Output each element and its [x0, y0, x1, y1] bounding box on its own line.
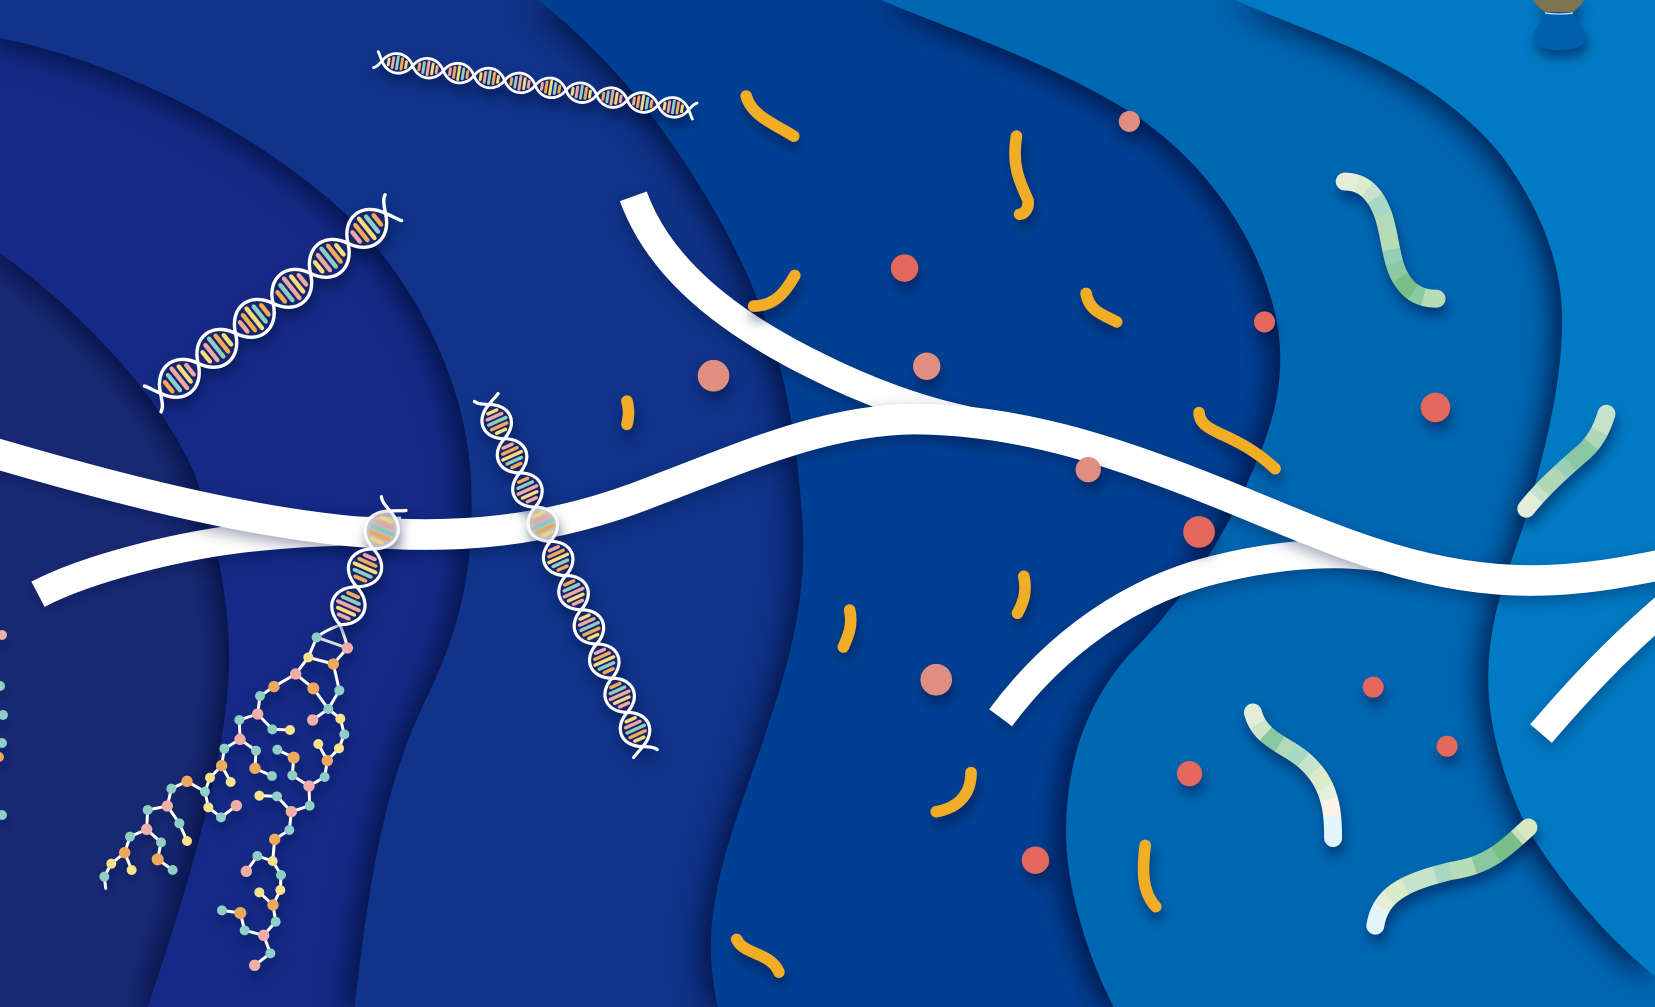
- layer 3: [538, 0, 1655, 1007]
- worm 4: [1366, 819, 1537, 935]
- pink nodes: [141, 642, 353, 971]
- fragment 5: [627, 401, 629, 424]
- ribbon: main strand: [0, 419, 1655, 581]
- flask body: [1533, 13, 1586, 50]
- ribbon: left branch: [38, 531, 401, 594]
- molecule bonds: [104, 625, 347, 965]
- DNA helix: diagonal left: [141, 192, 406, 414]
- RNA molecule unravelling from helix: [99, 625, 353, 971]
- fragment 8: [843, 610, 851, 647]
- yellow nodes: [106, 652, 345, 897]
- flask rim: [1545, 13, 1573, 14]
- worm 2: [1517, 405, 1615, 518]
- orange nodes: [119, 658, 339, 919]
- fragment 6: [1199, 413, 1275, 469]
- ribbon: far right branch: [1541, 596, 1655, 734]
- fragment 2: [1015, 136, 1028, 214]
- molecule fragment at left edge: [0, 630, 8, 820]
- DNA helix: short, above molecule: [325, 495, 409, 631]
- flask cap: [1533, 0, 1584, 12]
- DNA helix: crossing the ribbon: [472, 391, 660, 761]
- ribbon: upper branch: [633, 196, 988, 424]
- fragment 7: [1018, 576, 1025, 613]
- icon: flask at top right: [1533, 0, 1586, 50]
- teal nodes: [99, 632, 349, 958]
- green segmented worms: [1244, 173, 1615, 935]
- pink dots: [698, 111, 1140, 696]
- dots: [698, 111, 1458, 874]
- red dots: [891, 254, 1458, 874]
- worm 3: [1244, 703, 1342, 847]
- fragment 4: [1086, 293, 1117, 322]
- white ribbons: [0, 196, 1655, 734]
- fragment 10: [1143, 845, 1156, 907]
- layer 1: [1235, 0, 1655, 976]
- ribbon: lower right branch: [1001, 554, 1409, 718]
- layer 2: [881, 0, 1655, 1007]
- DNA helix: top: [373, 50, 697, 121]
- fragment 11: [737, 939, 779, 972]
- fragment 3: [754, 275, 795, 306]
- yellow fragments: [627, 96, 1275, 972]
- worm 1: [1336, 173, 1446, 308]
- fragment 1: [746, 96, 794, 136]
- fragment 9: [936, 773, 971, 812]
